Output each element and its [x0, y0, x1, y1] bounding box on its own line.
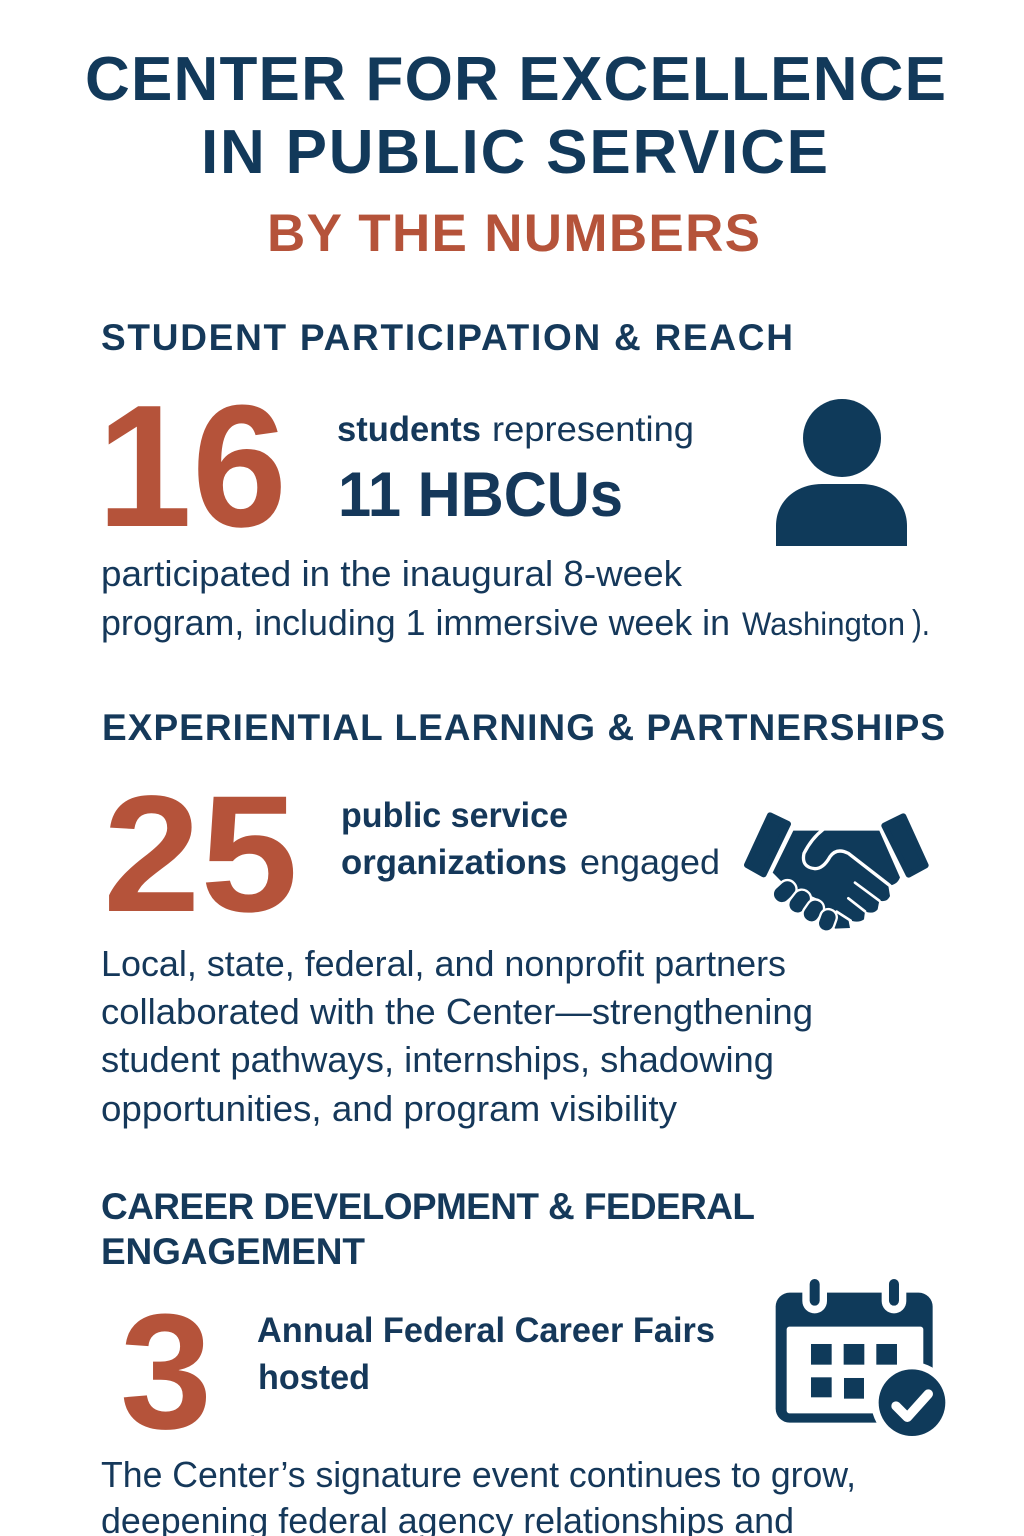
text: partners description: student pathways, internships, shadowing [101, 1039, 774, 1080]
number: 3: 3 [120, 1280, 212, 1463]
panel: career development and federal engagement [101, 1186, 953, 1536]
text: public service organizations engaged [341, 796, 720, 882]
heading: career development: ENGAGEMENT [101, 1231, 365, 1272]
text: annual federal career fairs [257, 1311, 715, 1397]
text: partners description: opportunities, and program visibility [101, 1088, 677, 1129]
text: program description: participated in the inaugural 8-week [101, 553, 683, 594]
title: CENTER FOR EXCELLENCE [85, 45, 946, 114]
text: signature event description: The Center’s signature event continues to grow, [101, 1454, 856, 1495]
heading: career development: CAREER DEVELOPMENT & FEDERAL [101, 1186, 755, 1227]
subtitle: BY THE NUMBERS [267, 204, 760, 263]
icon: calendar with check [776, 1279, 953, 1443]
number: 25: 25 [103, 762, 298, 947]
panel: student participation and reach [97, 317, 930, 643]
heading: career development [101, 1186, 755, 1272]
icon: handshake [747, 815, 926, 934]
text: program description: program, including 1 immersive week in [101, 602, 730, 643]
heading: student participation: STUDENT PARTICIPATION & REACH [101, 317, 793, 358]
panel: experiential learning and partnerships [101, 707, 945, 1129]
icon: person [776, 399, 907, 546]
text: program description [101, 553, 930, 643]
text: signature event description [101, 1454, 856, 1536]
text: program description: ). [912, 602, 930, 643]
text: 11 HBCUs: 11 HBCUs [338, 460, 623, 530]
text: partners description: Local, state, federal, and nonprofit partners [101, 943, 786, 984]
text: partners description: collaborated with the Center—strengthening [101, 991, 813, 1032]
text: annual federal career fairs: hosted [258, 1358, 370, 1397]
text: students representing [337, 410, 694, 449]
title: IN PUBLIC SERVICE [201, 118, 828, 187]
title [85, 45, 946, 187]
text: public service organizations engaged: organizations [341, 843, 567, 882]
text: students representing: students [337, 410, 481, 449]
text: partners description [101, 943, 813, 1129]
text: program description: Washington [742, 606, 905, 642]
text: public service organizations engaged: public service [341, 796, 568, 835]
number: 16: 16 [97, 368, 287, 563]
text: annual federal career fairs: Annual Federal Career Fairs [257, 1311, 715, 1350]
heading: experiential learning: EXPERIENTIAL LEARNING & PARTNERSHIPS [102, 707, 945, 748]
text: public service organizations engaged: engaged [580, 843, 720, 882]
text: students representing: representing [492, 410, 694, 449]
